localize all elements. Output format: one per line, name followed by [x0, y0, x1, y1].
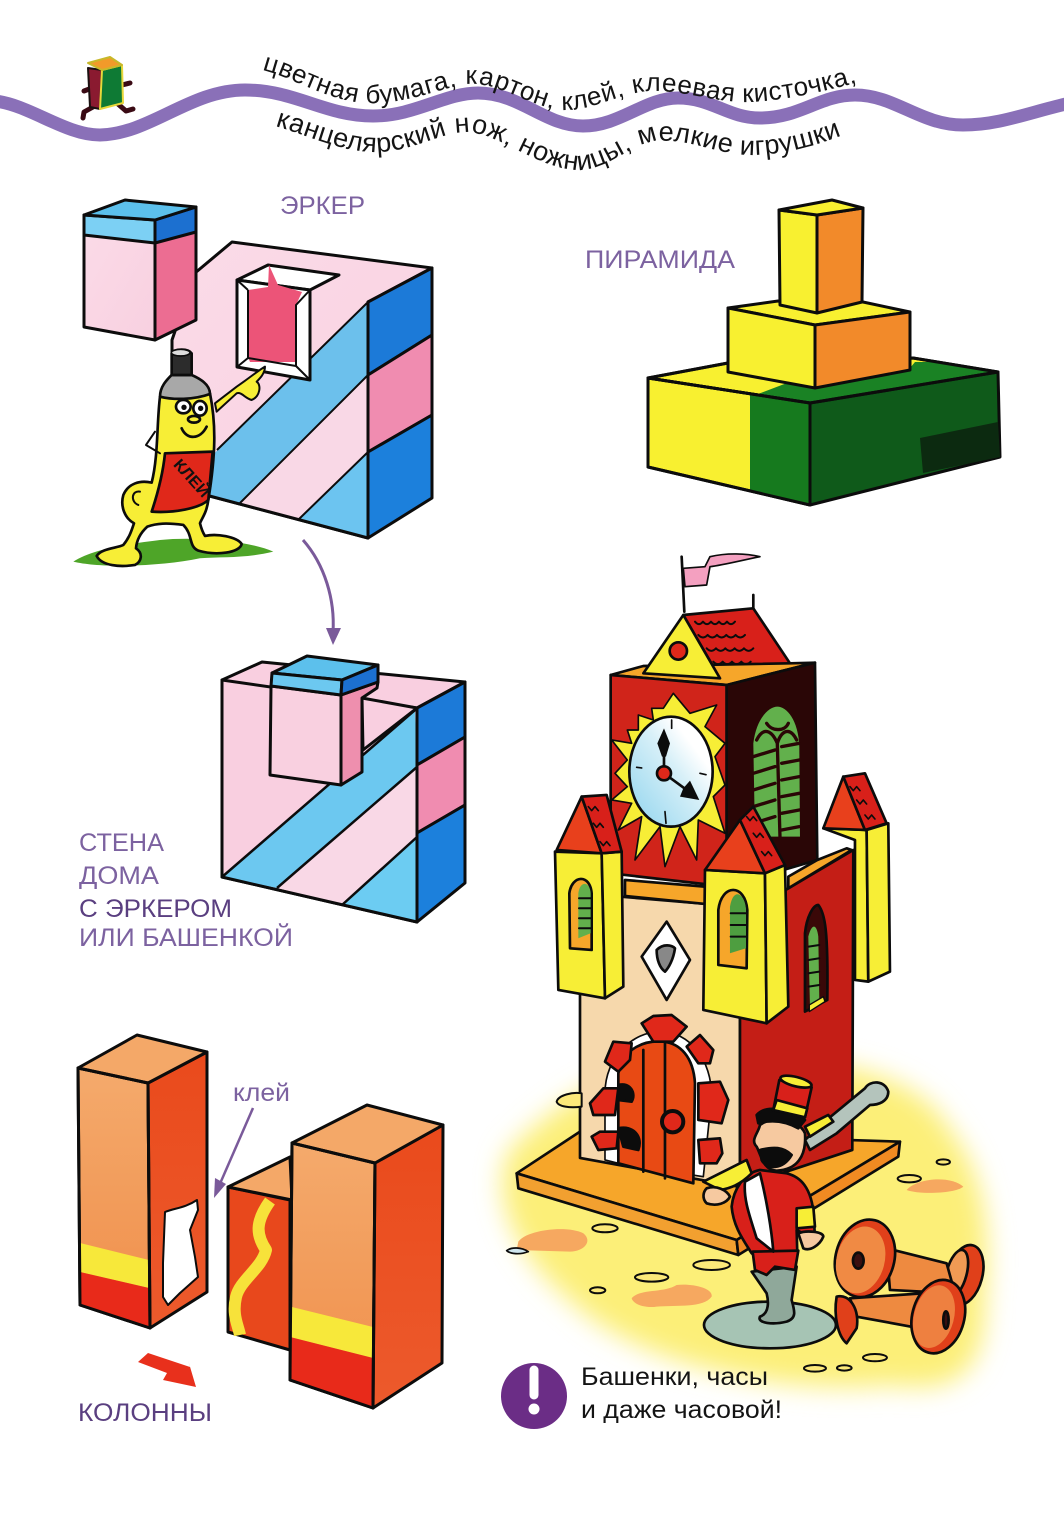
upper tower red face: [611, 675, 727, 887]
caption: wall with bay: ИЛИ БАШЕНКОЙ: [79, 922, 293, 952]
caption: wall with bay: [79, 829, 293, 952]
heading: ПИРАМИДА: ПИРАМИДА: [585, 246, 735, 274]
middle turret: [703, 807, 788, 1023]
door, soldier and cannon: [507, 1015, 990, 1372]
right small turret: [823, 773, 890, 982]
note text: [581, 1363, 782, 1424]
character: glue tube: КЛЕЙ: [170, 455, 214, 501]
flag: [682, 554, 760, 612]
caption: wall with bay: СТЕНА: [79, 829, 164, 857]
label: клей with arrow: клей: [233, 1079, 290, 1107]
tube body with curled tail and legs: [97, 393, 242, 566]
materials list text: канцелярский нож, ножницы, мелкие игрушки: [276, 112, 840, 170]
arrow: from wall to assembled wall: [303, 540, 341, 645]
cannon made of spools: [826, 1213, 990, 1359]
header wave band: [0, 90, 1064, 135]
icon: walking matchbox: [83, 57, 133, 118]
clock sun: [612, 693, 725, 867]
caption: wall with bay: С ЭРКЕРОМ: [79, 895, 232, 923]
note text: и даже часовой!: [581, 1396, 782, 1424]
left turret: [555, 795, 623, 998]
ground under tower: [502, 1056, 987, 1387]
clock tower: [555, 554, 890, 1187]
clock face: [629, 717, 713, 827]
upper tower dark face with window: [727, 663, 817, 887]
heading: КОЛОННЫ: КОЛОННЫ: [78, 1399, 212, 1427]
door with arch: [590, 1015, 728, 1183]
caption: wall with bay: ДОМА: [79, 862, 159, 890]
note text: Башенки, часы: [581, 1363, 768, 1391]
arrow: red pointer: [138, 1353, 196, 1387]
wall with bay cut-out: [172, 242, 432, 538]
label: клей with arrow: [214, 1079, 290, 1198]
puddles: [507, 1093, 963, 1372]
materials list text: цветная бумага, картон, клей, клеевая кисточка,: [264, 57, 856, 111]
icon: exclamation mark badge: [501, 1363, 567, 1429]
pyramid of blocks: [648, 200, 1000, 505]
glued column: [78, 1035, 207, 1328]
materials list text: [264, 57, 856, 170]
character: glue tube: [73, 349, 273, 566]
assembled column: [228, 1105, 443, 1408]
board base: [517, 1132, 900, 1255]
assembled wall with bay: [222, 656, 465, 922]
pointing arm: [215, 367, 265, 412]
roof of main tower: [611, 595, 815, 685]
falling bay block: [84, 200, 196, 340]
ground patch: [73, 539, 273, 566]
toy soldier: [703, 1073, 888, 1348]
glue smear: [163, 1200, 198, 1305]
heading: ЭРКЕР: ЭРКЕР: [280, 192, 365, 220]
lower tower: [580, 848, 853, 1187]
